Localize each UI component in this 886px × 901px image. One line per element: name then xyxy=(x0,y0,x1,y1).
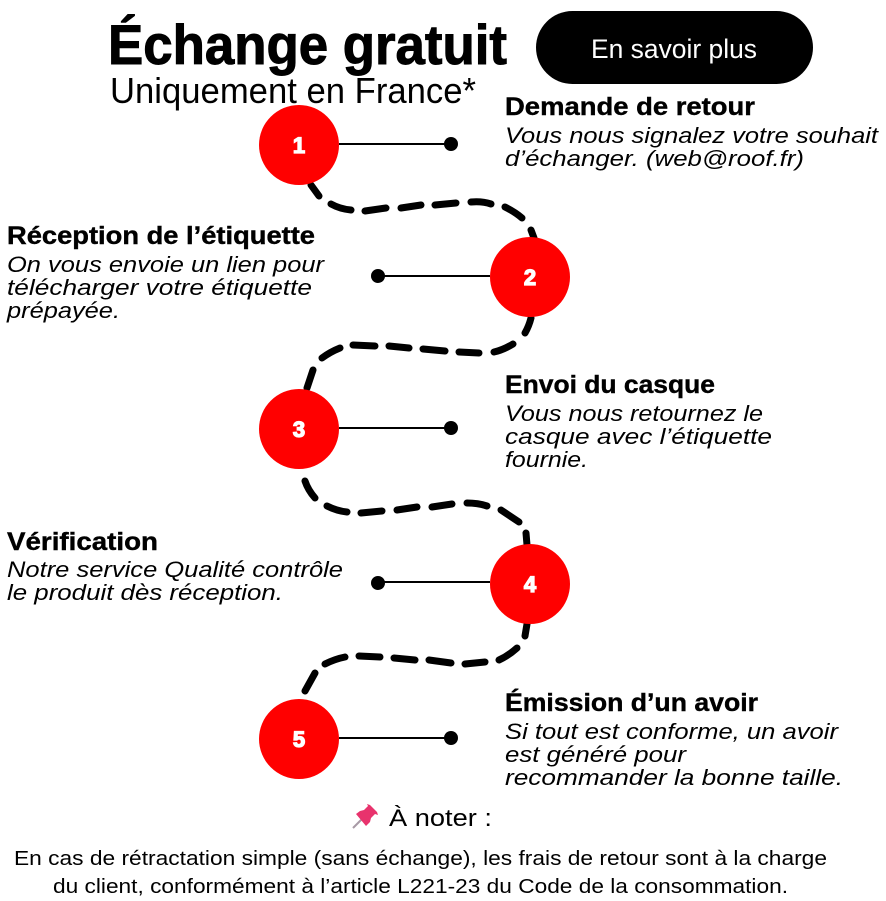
step 1 text: Vous nous signalez votre souhait xyxy=(505,123,880,148)
step 1 marker xyxy=(259,105,458,185)
step 2 marker xyxy=(371,237,570,317)
step 5 text: recommander la bonne taille. xyxy=(505,765,843,790)
step 5 text: est généré pour xyxy=(505,742,688,767)
step 4 text: Notre service Qualité contrôle xyxy=(7,557,343,582)
step 3 marker: 3 xyxy=(293,417,305,442)
step 4 text xyxy=(7,528,343,605)
step 3 text: fournie. xyxy=(505,447,588,472)
step 5 marker: 5 xyxy=(293,727,305,752)
dashed path: 2 to 3 xyxy=(307,318,531,388)
step 1 marker: 1 xyxy=(293,133,305,158)
icon: pushpin xyxy=(353,804,378,828)
note text: du client, conformément à l’article L221-23 du Code de la consommation. xyxy=(53,876,788,898)
step 3 marker xyxy=(259,389,458,469)
dashed path: 1 to 2 xyxy=(311,185,534,238)
step 4 marker: 4 xyxy=(524,572,537,597)
step 4 text: le produit dès réception. xyxy=(7,580,283,605)
step 2 marker: 2 xyxy=(524,265,536,290)
step 2 text: prépayée. xyxy=(6,298,120,323)
step 2 text: Réception de l’étiquette xyxy=(7,222,315,250)
step 5 text: Si tout est conforme, un avoir xyxy=(505,719,840,744)
step 4 text: Vérification xyxy=(7,528,158,556)
step 5 marker xyxy=(259,699,458,779)
button: en savoir plus xyxy=(536,11,813,84)
step 3 text xyxy=(505,371,772,472)
step 3 text: Vous nous retournez le xyxy=(505,401,763,426)
dashed path: 4 to 5 xyxy=(305,624,527,691)
step 5 text: Émission d’un avoir xyxy=(505,688,758,717)
title: Échange gratuit xyxy=(108,13,507,76)
step 2 text xyxy=(6,222,326,323)
dashed path: 3 to 4 xyxy=(305,481,527,545)
step 3 text: casque avec l’étiquette xyxy=(505,424,772,449)
subtitle: Uniquement en France* xyxy=(110,70,476,111)
button: en savoir plus: En savoir plus xyxy=(591,34,757,64)
step 1 text: Demande de retour xyxy=(505,93,755,121)
step 2 text: télécharger votre étiquette xyxy=(7,275,312,300)
step 2 text: On vous envoie un lien pour xyxy=(7,252,326,277)
step 5 text xyxy=(505,688,843,790)
step 3 text: Envoi du casque xyxy=(505,371,715,399)
note text xyxy=(14,848,827,898)
step 1 text: d’échanger. (web@roof.fr) xyxy=(505,146,804,171)
note heading: À noter : xyxy=(389,805,492,832)
step 4 marker xyxy=(371,544,570,624)
step 1 text xyxy=(505,93,880,171)
note text: En cas de rétractation simple (sans échange), les frais de retour sont à la charge xyxy=(14,848,827,870)
